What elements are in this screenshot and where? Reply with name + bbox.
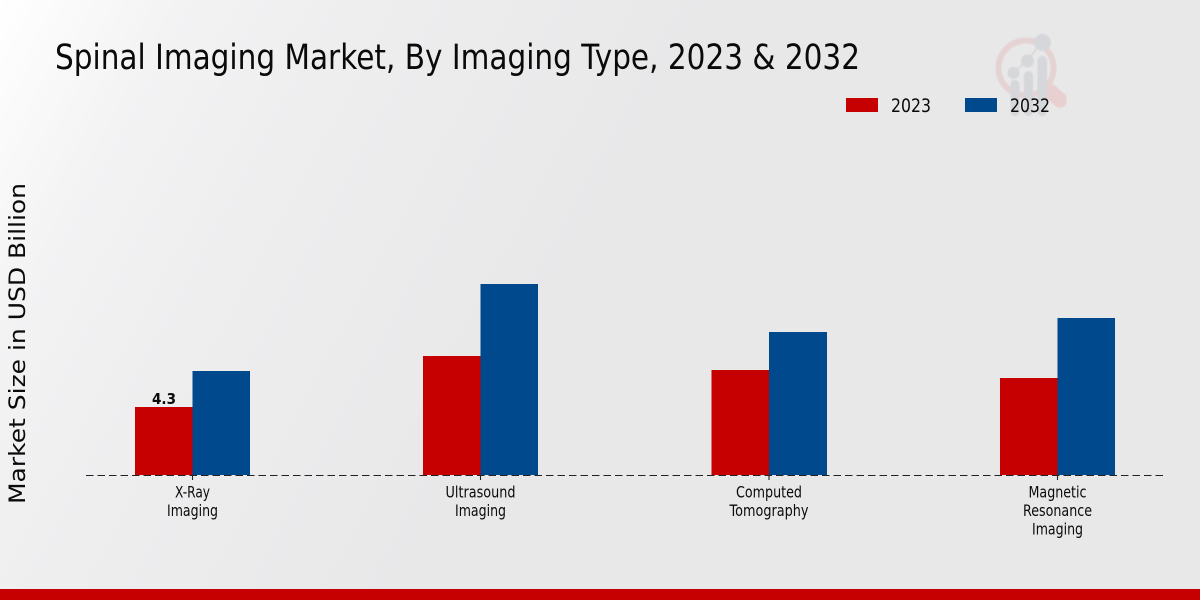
legend item: 2023: 2023 xyxy=(891,96,931,117)
label: Computed Tomography xyxy=(729,482,809,520)
label: Magnetic Resonance Imaging: Magnetic xyxy=(1028,482,1086,502)
bar chart xyxy=(135,284,1115,475)
group: X-Ray Imaging xyxy=(135,371,250,475)
watermark logo xyxy=(998,34,1060,116)
label: X-Ray Imaging: X-Ray xyxy=(175,482,210,502)
label: Ultrasound Imaging: Imaging xyxy=(455,501,506,520)
baseline xyxy=(86,475,1164,480)
category labels xyxy=(167,482,1092,538)
group: Computed Tomography xyxy=(712,332,827,475)
label: Magnetic Resonance Imaging: Imaging xyxy=(1032,520,1083,538)
group: Ultrasound Imaging xyxy=(423,284,538,475)
y-axis label: Market Size in USD Billion xyxy=(5,183,31,504)
legend xyxy=(846,96,1050,117)
bottom red band xyxy=(0,589,1200,600)
legend item: 2032 xyxy=(965,96,1050,117)
label: Ultrasound Imaging xyxy=(446,482,516,520)
label: Magnetic Resonance Imaging: Resonance xyxy=(1023,501,1092,520)
legend item: 2032: 2032 xyxy=(1010,96,1050,117)
label: X-Ray Imaging xyxy=(167,482,218,520)
label: Computed Tomography: Tomography xyxy=(729,501,809,520)
label: Magnetic Resonance Imaging xyxy=(1023,482,1092,538)
title: Spinal Imaging Market, By Imaging Type, 2023 & 2032 xyxy=(55,38,860,78)
label: Computed Tomography: Computed xyxy=(736,482,802,502)
group: Magnetic Resonance Imaging xyxy=(1000,318,1115,475)
data label: 4.3: 4.3 xyxy=(152,390,176,408)
label: X-Ray Imaging: Imaging xyxy=(167,501,218,520)
label: Ultrasound Imaging: Ultrasound xyxy=(446,482,516,502)
legend item: 2023 xyxy=(846,96,931,117)
